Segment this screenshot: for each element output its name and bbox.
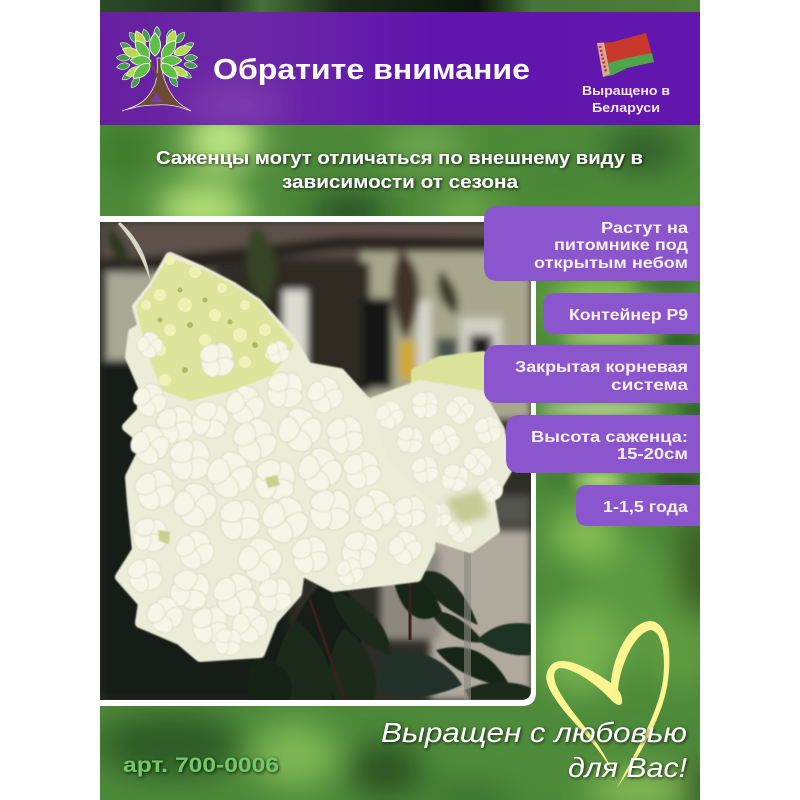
background: green bokeh [95,0,725,800]
panel: grows outdoors [484,206,700,281]
slogan [381,717,687,783]
slogan: для Вас! [568,752,687,783]
title: Обратите внимание [213,54,530,86]
panel: grows outdoors: Растут на [601,220,688,237]
main flower [120,255,433,661]
panel: root system: Закрытая корневая [515,359,688,376]
green top [140,262,290,397]
icon: heart [546,621,669,788]
panel: height: 15-20см [617,446,688,463]
slogan: Выращен с любовью [381,717,687,748]
panel: age: 1-1,5 года [603,499,688,516]
subtitle [156,148,643,192]
photo frame [100,216,536,706]
panel: age [576,485,700,526]
subtitle: зависимости от сезона [282,172,519,192]
panel: container [543,293,700,334]
flag caption [582,83,670,115]
second flower [365,355,507,548]
article number: арт. 700-0006 [123,754,279,777]
panel: root system: система [611,377,688,394]
subtitle: Саженцы могут отличаться по внешнему виду в [156,148,643,168]
panel: grows outdoors: открытым небом [534,255,688,272]
flag caption: Беларуси [592,100,660,115]
panel: root system [484,345,700,403]
logo: tree [116,26,198,111]
panel: height [506,415,700,473]
photo background: house and garden [100,222,531,700]
icon: Belarus flag [597,33,654,77]
photo: hydrangea [100,222,531,700]
panel: height: Высота саженца: [531,429,688,446]
panel: grows outdoors: питомнике под [554,237,688,254]
header band [100,12,700,127]
flag caption: Выращено в [582,83,670,98]
panel: container: Контейнер Р9 [569,307,688,324]
leaves [247,571,531,700]
